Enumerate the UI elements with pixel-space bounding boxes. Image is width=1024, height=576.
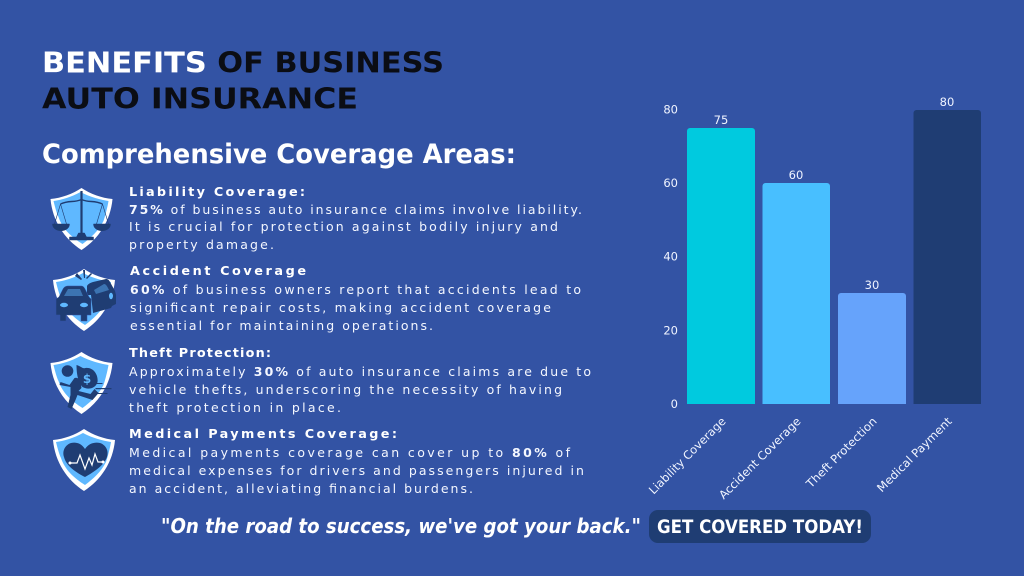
y axis labels: 80 [663,102,678,116]
panel: liability coverage [50,185,582,252]
bar chart [646,95,981,502]
text: liability coverage: property damage. [129,237,274,252]
heading: comprehensive coverage areas: Comprehensive Coverage Areas: [42,139,516,170]
y axis labels: 0 [671,397,678,411]
bar: liability coverage 75: 75 [714,113,728,127]
text: theft protection: Approximately 30% of auto insurance claims are due to [129,364,591,379]
text: accident coverage: significant repair costs, making accident coverage [130,300,551,315]
x axis labels: Accident Coverage [716,414,804,502]
bar: accident coverage 60: 60 [789,168,803,182]
title: BENEFITS OF BUSINESS [42,46,444,80]
bar: theft protection 30: 30 [865,278,879,292]
y axis labels [663,102,678,411]
button: get covered today: GET COVERED TODAY! [657,516,863,538]
icon: shield with crashed cars [53,269,116,331]
x axis labels: Liability Coverage [646,414,729,497]
text: medical payments coverage: medical expenses for drivers and passengers injured in [129,463,584,478]
text: theft protection [129,346,591,415]
text: medical payments coverage: Medical Payments Coverage: [129,427,397,442]
icon: shield with running thief [50,352,112,414]
text: theft protection: theft protection in place. [129,400,341,415]
bar: medical payment 80 [914,95,981,404]
text: liability coverage: Liability Coverage: [129,185,305,200]
icon: shield with running thief: $ [83,372,91,386]
text: theft protection: vehicle thefts, underscoring the necessity of having [129,382,562,397]
text: theft protection: Theft Protection: [129,346,271,361]
panel: medical payments coverage [53,427,584,496]
bar: medical payment 80: 80 [940,95,954,109]
bar: theft protection 30 [838,278,906,404]
text: accident coverage: Accident Coverage [130,264,306,279]
x axis labels [646,414,955,502]
text: liability coverage [129,185,582,252]
text: medical payments coverage: Medical payments coverage can cover up to 80% of [129,445,571,460]
bar: accident coverage 60 [762,168,830,404]
text: accident coverage: essential for maintaining operations. [130,318,433,333]
y axis labels: 40 [663,250,678,264]
button: get covered today [649,510,871,543]
quote: "On the road to success, we've got your back." [161,514,641,538]
x axis labels: Medical Payment [874,414,955,495]
text: medical payments coverage [129,427,584,496]
y axis labels: 20 [663,324,678,338]
bar: liability coverage 75 [687,113,755,404]
title [42,46,444,116]
panel: accident coverage [53,264,581,333]
title: AUTO INSURANCE [42,82,358,116]
y axis labels: 60 [663,176,678,190]
panel: theft protection [50,346,591,415]
icon: shield with scales [50,188,112,250]
x axis labels: Theft Protection [803,414,880,491]
text: accident coverage: 60% of business owners report that accidents lead to [130,282,581,297]
text: liability coverage: It is crucial for protection against bodily injury and [129,219,558,234]
text: medical payments coverage: an accident, alleviating financial burdens. [129,481,473,496]
icon: shield with heart and pulse [53,429,115,491]
text: liability coverage: 75% of business auto insurance claims involve liability. [129,202,582,217]
text: accident coverage [130,264,581,333]
